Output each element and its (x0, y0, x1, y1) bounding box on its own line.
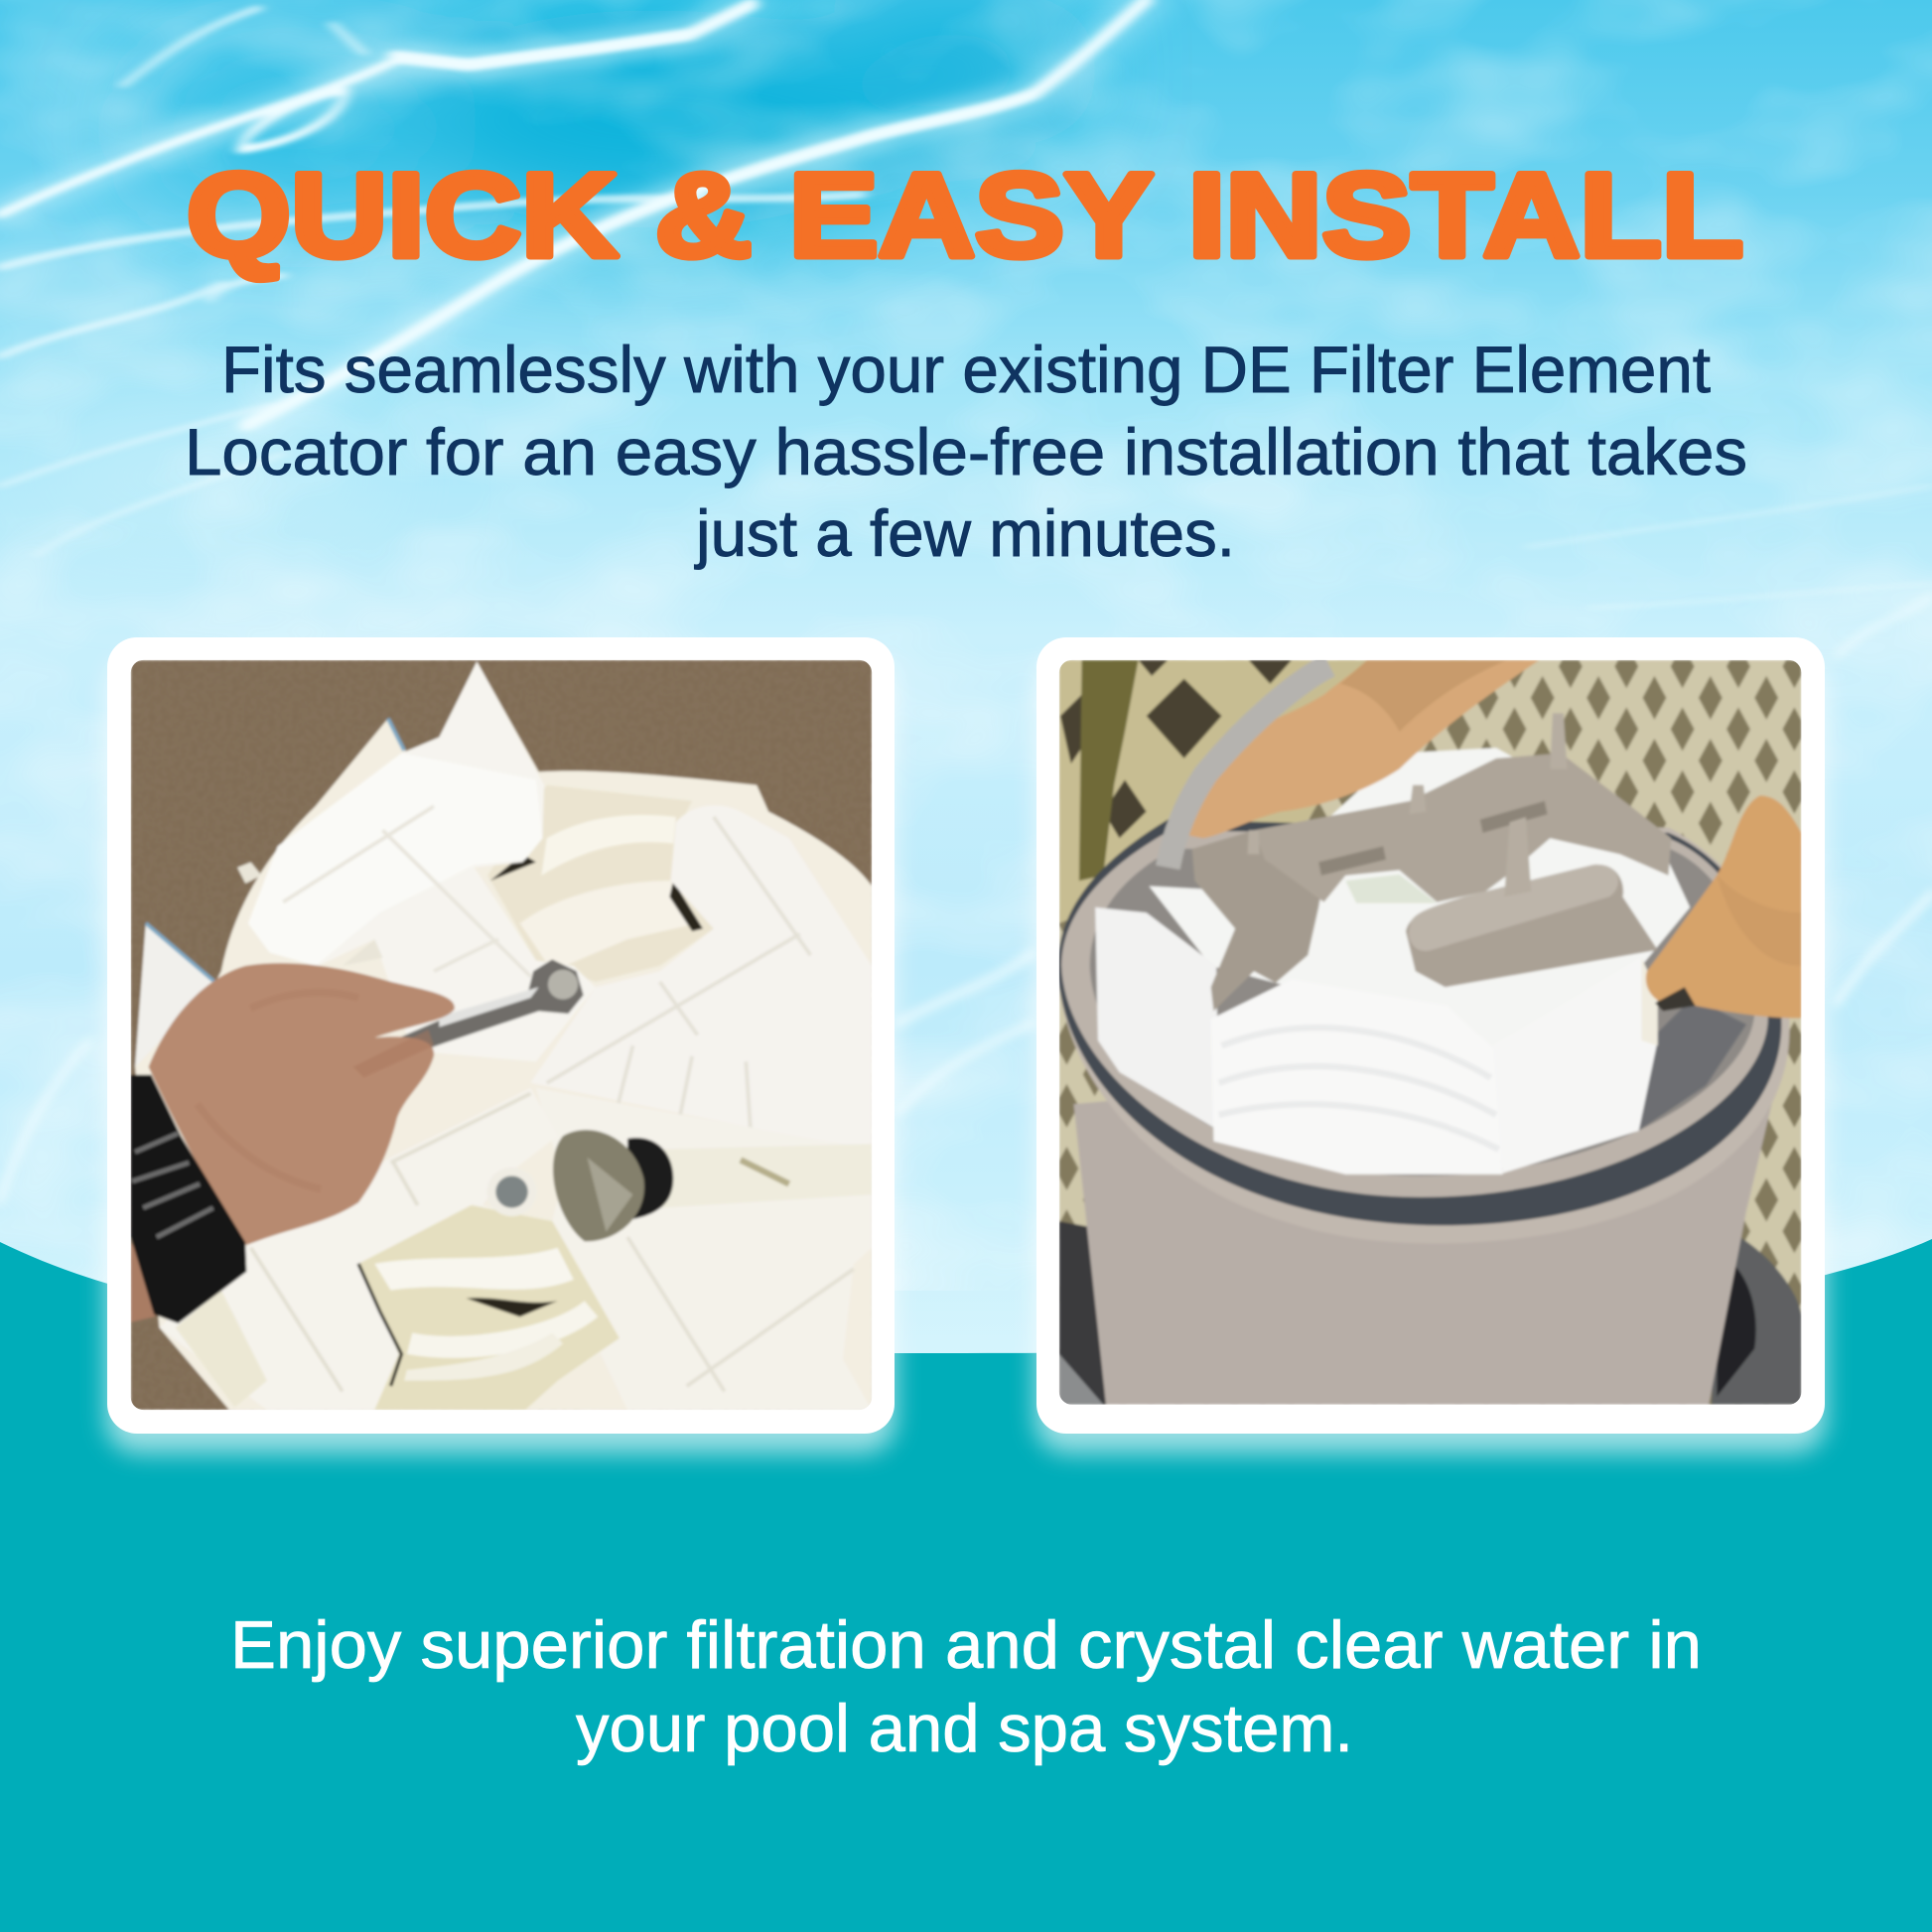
locator plate arm top left (319, 661, 594, 1060)
watch (131, 1075, 246, 1323)
closing text: your pool and spa system. (576, 1691, 1353, 1766)
photo: element installed in filter tank (1058, 660, 1801, 1405)
arm (131, 1243, 156, 1322)
closing text: Enjoy superior filtration and crystal clear water in (230, 1607, 1702, 1683)
hose (660, 1144, 872, 1208)
intro text: Locator for an easy hassle-free installation that takes (185, 415, 1747, 488)
lower right plate (536, 1088, 872, 1410)
inner lip (1061, 830, 1768, 1197)
dark base right and left (1712, 1226, 1801, 1405)
left filter panel (1095, 907, 1219, 1131)
bolt (494, 1180, 519, 1217)
tank body (1073, 1040, 1787, 1405)
gasket (1058, 820, 1781, 1225)
locator lower right arm (1406, 865, 1658, 987)
intro text: just a few minutes. (694, 496, 1235, 570)
hose (1168, 665, 1329, 868)
locator left arm (1192, 830, 1324, 1011)
upper hole folds (487, 785, 714, 982)
lattice left section (1059, 660, 1410, 923)
tank lip (1058, 822, 1789, 1243)
photo: wrench tightening locator (131, 660, 872, 1410)
plug collar (627, 1138, 673, 1220)
lower left plate (161, 1090, 550, 1410)
locator plate right arm (531, 805, 872, 1152)
title: QUICK & EASY INSTALL (187, 149, 1743, 282)
plug (553, 1130, 644, 1241)
upper hand (1188, 660, 1539, 838)
intro text: Fits seamlessly with your existing DE Filter Element (221, 333, 1711, 406)
right hand (1646, 795, 1801, 1018)
locator window (1345, 875, 1437, 903)
locator main body (1254, 754, 1671, 902)
card glows (105, 655, 1827, 1453)
tank interior (1090, 846, 1754, 1175)
panel: left photo card (107, 637, 895, 1434)
hand (149, 963, 455, 1245)
locator posts (1248, 713, 1568, 897)
intro text (185, 333, 1747, 570)
teal wave band (0, 1239, 1932, 1932)
right filter panel (1493, 958, 1657, 1173)
wrench (401, 958, 585, 1048)
center filter panel (1211, 979, 1503, 1174)
closing text (230, 1607, 1702, 1766)
panel: right photo card (1036, 637, 1825, 1434)
fabric disc (135, 661, 872, 1410)
lower hole (358, 1205, 620, 1410)
back white elements (1149, 748, 1690, 1051)
